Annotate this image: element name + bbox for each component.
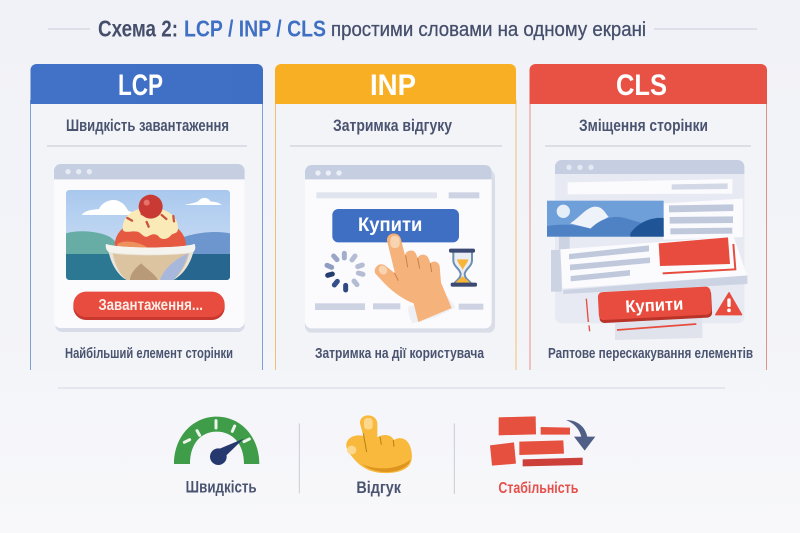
CLS subtitle: Зміщення сторінки bbox=[579, 117, 708, 135]
panel: INP bbox=[275, 64, 516, 370]
INP header: INP bbox=[370, 69, 416, 102]
LCP caption: Найбільший елемент сторінки bbox=[65, 345, 233, 362]
shifted image block bbox=[547, 199, 743, 240]
button: buy shifted: Купити bbox=[625, 294, 684, 317]
panel: LCP bbox=[30, 64, 263, 370]
CLS header: CLS bbox=[616, 69, 667, 102]
INP subtitle: Затримка відгуку bbox=[333, 117, 453, 135]
response label: Відгук bbox=[356, 478, 402, 497]
CLS header bbox=[530, 64, 767, 104]
title: LCP / INP / CLS bbox=[184, 16, 326, 42]
title: Схема 2: bbox=[98, 16, 178, 42]
image: dessert bbox=[66, 190, 230, 280]
title bbox=[48, 16, 757, 42]
INP browser illustration bbox=[305, 165, 495, 333]
panel: CLS bbox=[530, 64, 767, 370]
CLS browser illustration bbox=[547, 160, 747, 340]
button: loading: Завантаження... bbox=[98, 297, 203, 314]
icon: hand bbox=[375, 233, 456, 323]
shifted text block bbox=[560, 237, 747, 289]
LCP header bbox=[30, 64, 263, 104]
icon: spinner bbox=[327, 253, 363, 290]
speed label: Швидкість bbox=[186, 477, 257, 496]
stability label: Стабільність bbox=[498, 480, 578, 497]
icon: speedometer bbox=[174, 417, 259, 465]
icon: shifting bricks bbox=[490, 416, 595, 466]
LCP subtitle: Швидкість завантаження bbox=[66, 117, 229, 135]
button: buy: Купити bbox=[358, 215, 422, 236]
icon: warning bbox=[716, 293, 742, 315]
INP header bbox=[275, 64, 516, 104]
bottom summary row bbox=[174, 415, 595, 497]
button: buy bbox=[332, 209, 459, 242]
LCP header: LCP bbox=[118, 69, 163, 102]
button: buy shifted bbox=[586, 286, 712, 340]
button: loading bbox=[73, 292, 225, 320]
icon: hourglass bbox=[449, 249, 477, 287]
INP caption: Затримка на дії користувача bbox=[315, 345, 485, 362]
icon: hand bbox=[346, 415, 412, 473]
LCP browser illustration bbox=[54, 164, 245, 332]
title: простими словами на одному екрані bbox=[331, 18, 646, 41]
